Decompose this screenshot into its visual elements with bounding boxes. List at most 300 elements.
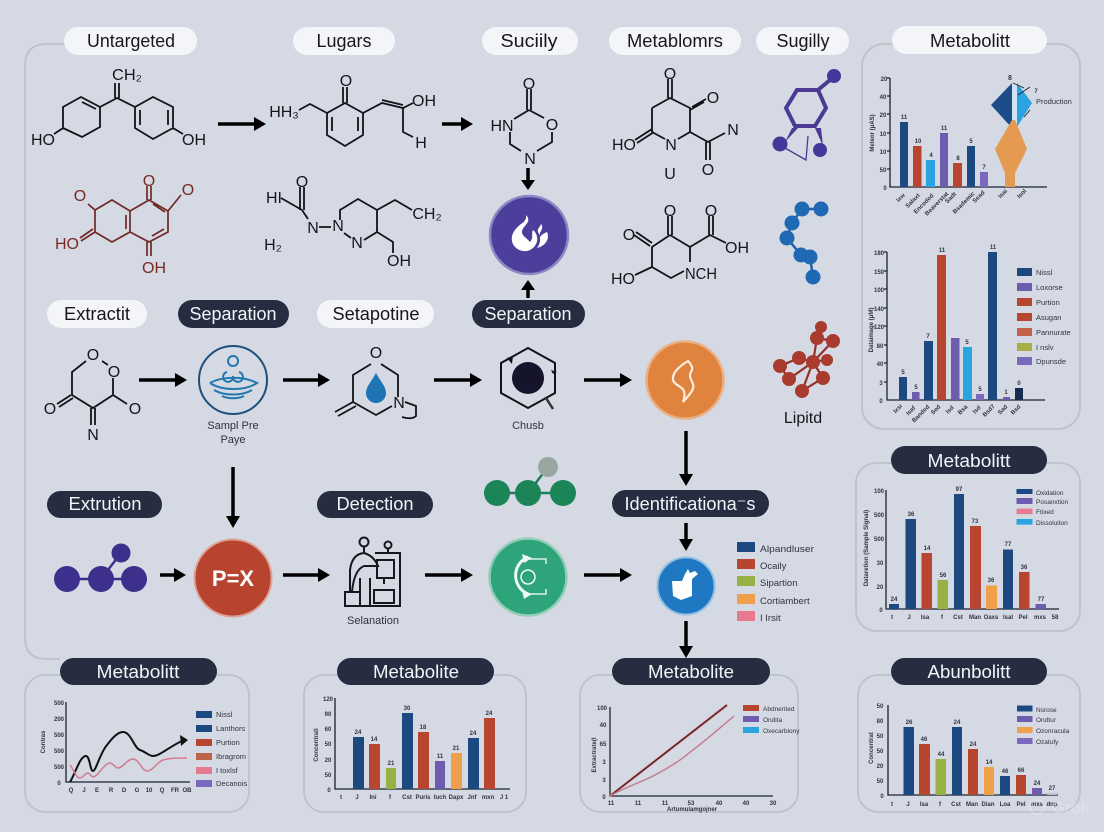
bar chart: J (907, 615, 911, 621)
bar chart: 100 (874, 489, 885, 495)
molecule: top heterocycle: O (523, 76, 535, 93)
legend: workflow: Ocaily (760, 561, 787, 572)
diagram: diamond production figure: 8 (1008, 75, 1012, 82)
line chart: 30 (770, 801, 777, 807)
bar chart: t (340, 795, 342, 801)
molecule: water drop ring (335, 345, 416, 418)
heading: Metabolite: Metabolite (648, 662, 734, 682)
bar chart: middle right: Sad (997, 404, 1010, 416)
legend: middle right: Loxorse (1036, 283, 1063, 292)
molecule: bottom centre left: N (351, 235, 363, 252)
molecule: extraction ring: N (87, 427, 99, 444)
molecule: red quinone: OH (142, 260, 166, 277)
bar chart: top right: Isai (998, 188, 1009, 200)
bar chart: 500 (874, 513, 885, 519)
line chart: 11 (608, 801, 615, 807)
bar chart: Isa (920, 802, 929, 808)
bar chart: t (891, 615, 893, 621)
label: Selanation: Selanation (347, 615, 399, 627)
line chart: Q (160, 788, 165, 794)
bar chart: top right: Ixw (896, 193, 907, 204)
line chart: 500 (54, 701, 65, 707)
bar chart: top right: Bsademic (952, 191, 977, 215)
line chart: 500 (54, 749, 65, 755)
molecule: bottom piperidine: O (664, 203, 676, 220)
molecule: top piperidine: O (707, 90, 719, 107)
arrow (521, 168, 535, 190)
pill: Extractit (47, 300, 147, 328)
bar chart: PeI (1018, 615, 1028, 621)
icon: hexagon with black disc (501, 348, 557, 409)
heading: Metabolitt (60, 658, 217, 685)
bar chart: top right: Salaxt (905, 193, 922, 210)
legend (196, 710, 248, 788)
arrow (226, 467, 240, 528)
molecule: bottom centre left: OH (387, 253, 411, 270)
molecule: top piperidine: N (665, 137, 677, 154)
legend: Purtion (216, 738, 240, 747)
line chart: 11 (662, 801, 669, 807)
bar chart: Concentrat (869, 732, 875, 764)
bar chart: 36 (908, 512, 915, 518)
bar chart: 24 (891, 597, 898, 603)
line chart: Extractrate(I (592, 737, 598, 773)
bar chart: mxs (1031, 802, 1044, 808)
diagram: diamond production figure (991, 75, 1072, 187)
bar chart: middle right: 100 (874, 288, 885, 294)
molecule: bottom centre left: O (296, 174, 308, 191)
molecule: red quinone (55, 173, 194, 277)
arrow (218, 117, 266, 131)
bar chart: J 1 (500, 795, 509, 801)
bar chart: IsaI (1003, 615, 1013, 621)
bar chart: top right: 10 (880, 150, 887, 156)
bar chart: 500 (874, 537, 885, 543)
line chart: 40 (600, 723, 607, 729)
label: Sampl Pre Paye (207, 420, 259, 446)
line chart: Contras (41, 730, 47, 753)
panel: top right charts (862, 26, 1080, 429)
legend: middle right: Purtion (1036, 298, 1060, 307)
bar chart: 0 (327, 788, 331, 794)
bar chart: 60 (325, 727, 332, 733)
bar chart: Concentrati (314, 728, 320, 762)
heading: Metabolite (337, 658, 494, 685)
arrow (160, 568, 186, 582)
bar chart: middle right: 11 (939, 248, 946, 254)
arrow (679, 523, 693, 551)
molecule: green ball and stick (484, 457, 576, 506)
bar chart: Oaxs (984, 615, 999, 621)
bar chart: 14 (371, 737, 378, 743)
molecule: red quinone: HO (55, 236, 79, 253)
bar chart: 50 (325, 742, 332, 748)
bar chart: middle right: 1 (1004, 390, 1008, 396)
bar chart: middle right: Bsa (957, 404, 970, 416)
line chart: 40 (743, 801, 750, 807)
bar chart: 20 (325, 758, 332, 764)
icon: purple flame circle (490, 196, 568, 274)
line chart: G (135, 788, 140, 794)
molecule: top heterocycle: N (524, 151, 536, 168)
bar chart: Puris (415, 795, 431, 801)
molecule: bottom piperidine: O (623, 227, 635, 244)
legend: Abdnerited (763, 706, 795, 713)
bar chart: PeI (1016, 802, 1026, 808)
molecule: water drop ring: N (393, 395, 405, 412)
line chart: 10 (146, 788, 153, 794)
molecule: bottom centre left: N (332, 218, 344, 235)
bar chart: top right: 11 (941, 126, 948, 132)
pill: Extrution: Extrution (68, 494, 142, 514)
legend: middle right: Nissl (1036, 268, 1053, 277)
molecule: bottom centre left: N (307, 220, 319, 237)
bar chart: 97 (956, 487, 963, 493)
bar chart: top right: 20 (880, 113, 887, 119)
molecule: top piperidine: HO (612, 137, 636, 154)
line chart: 11 (635, 801, 642, 807)
pill: Setapotine (317, 300, 434, 328)
bar chart: Cst (402, 795, 412, 801)
bar chart: 20 (877, 585, 884, 591)
pill: Suciily (482, 27, 578, 55)
heading: Metabolitt: Metabolitt (96, 662, 180, 682)
panel: bottom chart 4 (858, 658, 1080, 812)
molecule: top centre left: H (415, 135, 427, 152)
molecule: red quinone: O (182, 182, 194, 199)
bar chart: 36 (1021, 565, 1028, 571)
pill: Identificationa-s (612, 490, 769, 517)
bar chart: middle right: Isd (972, 405, 983, 415)
molecule: top centre left: O (340, 73, 352, 90)
label: Lipitd: Lipitd (784, 410, 822, 427)
pill: Separation (178, 300, 289, 328)
label: Chusb: Chusb (512, 420, 544, 432)
molecule: top piperidine: O (702, 162, 714, 179)
line chart: 3 (602, 778, 606, 784)
bar chart: 18 (420, 725, 427, 731)
legend (1016, 489, 1069, 527)
icon: red P=X circle: P=X (212, 566, 254, 591)
bar chart: Loa (1000, 802, 1011, 808)
label: Sampl Pre Paye: Sampl Pre (207, 420, 259, 432)
bar chart: 56 (940, 573, 947, 579)
bar chart: 24 (470, 731, 477, 737)
legend: Nissl (216, 710, 233, 719)
molecule: water drop ring: O (370, 345, 382, 362)
molecule: top centre left (269, 73, 436, 152)
bar chart: J (355, 795, 359, 801)
molecule: extraction ring: O (129, 401, 141, 418)
bar chart: top right: 5 (969, 139, 973, 145)
bar chart: J (906, 802, 910, 808)
bar chart: Cst (951, 802, 961, 808)
bar chart: f (941, 615, 944, 621)
legend: Ondtur (1036, 717, 1057, 724)
legend: Oxecarbiony (763, 728, 800, 735)
bar chart: 14 (986, 760, 993, 766)
bar chart: top right: Encoded (913, 193, 936, 215)
legend (743, 705, 800, 735)
molecule: bottom piperidine (611, 203, 749, 288)
panel: main workflow frame (25, 44, 66, 659)
line chart: 500 (54, 733, 65, 739)
molecule: bottom centre left: HI (266, 190, 282, 207)
pill: Lugars: Lugars (316, 31, 372, 51)
bar chart: 46 (1002, 769, 1009, 775)
bar chart: 0 (880, 794, 884, 800)
molecule: bottom centre left: CH₂ (412, 206, 442, 223)
bar chart: 50 (877, 704, 884, 710)
bar chart: 50 (877, 779, 884, 785)
diagram: diamond production figure: Production (1036, 97, 1072, 106)
bar chart: 30 (404, 706, 411, 712)
icon: orange circle (646, 342, 724, 418)
icon: blue circle (658, 558, 714, 614)
molecule: extraction ring: O (44, 401, 56, 418)
line chart: D (122, 788, 127, 794)
bar chart: 50 (877, 749, 884, 755)
molecule: red quinone: O (143, 173, 155, 190)
bar chart: middle right: 11 (990, 245, 997, 251)
bar chart: middle right: Bsd7 (982, 404, 997, 419)
legend: middle right: Dpunsde (1036, 357, 1066, 366)
arrow (434, 373, 482, 387)
line chart: 53 (688, 801, 695, 807)
molecule: top left (31, 67, 206, 149)
line chart: 0 (602, 795, 606, 801)
bar chart: middle right: 5 (978, 387, 982, 393)
bar chart: 80 (877, 719, 884, 725)
bar chart: 21 (388, 761, 395, 767)
pill: Sugilly: Sugilly (776, 31, 830, 51)
molecule: bottom piperidine: NCH (685, 266, 717, 283)
molecule: top centre left: HH₃ (269, 104, 299, 121)
bar chart: top right: 50 (880, 168, 887, 174)
pill: Suciily: Suciily (500, 31, 558, 51)
bar chart: f (389, 795, 392, 801)
pill: Extractit: Extractit (64, 304, 130, 324)
bar chart: middle right: 80 (877, 344, 884, 350)
bar chart: top right: Isol (1017, 188, 1028, 200)
legend: I toxlsf (216, 766, 239, 775)
icon: instrument (345, 538, 400, 606)
bar chart: top right: Meteor (μAS) (870, 114, 876, 152)
legend: Ibragrom (216, 752, 246, 761)
bar chart: middle right: Sed (930, 404, 943, 416)
molecule: top centre left: OH (412, 93, 436, 110)
legend: middle right: Pannurate (1036, 328, 1071, 337)
bar chart: Man (969, 615, 981, 621)
legend: Ozonracula (1036, 728, 1070, 735)
bar chart (869, 704, 1058, 808)
diagram: diamond production figure: 7 (1034, 89, 1038, 95)
molecule: red lipid (773, 321, 840, 398)
bar chart: 27 (1049, 786, 1056, 792)
bar chart: middle right: 120 (874, 325, 885, 331)
bar chart: Man (966, 802, 978, 808)
molecule: purple ball and stick (772, 69, 841, 160)
bar chart: top right: 10 (880, 132, 887, 138)
bar chart: 46 (921, 737, 928, 743)
arrow (521, 280, 535, 298)
bar chart: middle right: Ixsi (893, 403, 904, 415)
line chart: Artumulamgojner (667, 807, 718, 813)
pill: Lugars (293, 27, 395, 55)
molecule: top heterocycle (490, 76, 558, 168)
bar chart: middle right: 180 (874, 251, 885, 257)
bar chart: 73 (972, 519, 979, 525)
line chart: 65 (600, 742, 607, 748)
bar chart: t (891, 802, 893, 808)
pill: Metablomrs: Metablomrs (627, 31, 723, 51)
pill: Separation: Separation (190, 304, 276, 324)
label: Sampl Pre Paye: Paye (220, 434, 246, 446)
pill: Sugilly (756, 27, 849, 55)
molecule: bottom piperidine: OH (725, 240, 749, 257)
bar chart: 24 (486, 711, 493, 717)
watermark: Grok: Grok (1052, 800, 1089, 817)
bar chart: top right: 40 (880, 95, 887, 101)
bar chart: top right: 4 (929, 153, 933, 159)
bar chart (314, 697, 510, 801)
bar chart: 120 (323, 697, 334, 703)
molecule: top piperidine (612, 66, 739, 183)
arrow (442, 117, 473, 131)
icon: red P=X circle (194, 540, 272, 616)
legend: Nsrose (1036, 707, 1057, 714)
legend: Ftixed (1036, 509, 1054, 516)
bar chart: 20 (877, 764, 884, 770)
bar chart: 66 (1018, 768, 1025, 774)
bar chart: 50 (877, 734, 884, 740)
bar chart: middle right: 3 (879, 381, 883, 387)
bar chart: Isa (921, 615, 930, 621)
legend: workflow: I Irsit (760, 613, 781, 624)
pill: Untargeted (64, 27, 197, 55)
line chart (592, 705, 777, 813)
line chart: FR (171, 788, 180, 794)
heading: Metabolitt: Metabolitt (930, 31, 1010, 51)
bar chart: top right: 8 (956, 156, 960, 162)
bar chart: top right: 20 (881, 77, 888, 83)
icon: green circle (490, 538, 566, 616)
line chart: Q (69, 788, 74, 794)
bar chart: middle right: Isd (945, 405, 956, 415)
arrow (584, 568, 632, 582)
bar chart: mxn (482, 795, 494, 801)
bar chart: 77 (1005, 542, 1012, 548)
molecule: bottom centre left: H₂ (264, 237, 282, 254)
bar chart: middle right: 5 (901, 370, 905, 376)
bar chart: dnp (1046, 802, 1058, 808)
heading: Metabolite (612, 658, 770, 685)
bar chart: mxs (1034, 615, 1047, 621)
bar chart: 44 (938, 752, 945, 758)
line chart: 500 (54, 765, 65, 771)
molecule: top piperidine: N (727, 122, 739, 139)
bar chart: 36 (988, 578, 995, 584)
bar chart: 24 (355, 730, 362, 736)
bar chart: middle right: Isaf (906, 405, 918, 417)
bar chart: 50 (325, 773, 332, 779)
bar chart: top right: 10 (915, 139, 922, 145)
line chart: J (82, 788, 86, 794)
molecule: extraction ring: O (108, 364, 120, 381)
pill: Detection (317, 491, 433, 518)
bar chart: 24 (970, 742, 977, 748)
line chart: E (95, 788, 99, 794)
molecule: top heterocycle: HN (490, 118, 514, 135)
bar chart: middle right: 5 (914, 385, 918, 391)
legend: Ondita (763, 717, 783, 724)
legend: workflow: Cortiambert (760, 596, 810, 607)
pill: Separation (472, 300, 585, 328)
arrow (139, 373, 187, 387)
bar chart: middle right: Bsd (1010, 404, 1023, 416)
bar chart: middle right: 0 (1017, 381, 1021, 387)
legend: workflow: Sipartion (760, 578, 798, 589)
panel: bottom chart 3 (580, 658, 800, 813)
molecule: bottom centre left (264, 174, 442, 270)
pill: Metablomrs (609, 27, 741, 55)
bar chart: 21 (453, 746, 460, 752)
bar chart: Dapx (449, 795, 464, 801)
bar chart: 26 (906, 720, 913, 726)
bar chart: top right: 0 (883, 186, 887, 192)
bar chart: Jnf (468, 795, 478, 801)
bar chart: Ini (370, 795, 377, 801)
pill: Untargeted: Untargeted (87, 31, 175, 51)
bar chart: middle right: Banded (911, 404, 931, 424)
bar chart: top right: Sead (972, 190, 987, 204)
bar chart: top right: Sadt (945, 192, 958, 205)
line chart: R (109, 788, 114, 794)
bar chart: 0 (879, 608, 883, 614)
legend (1017, 706, 1070, 746)
panel: right middle chart (856, 446, 1080, 631)
bar chart: middle right: 5 (965, 340, 969, 346)
arrow (679, 431, 693, 486)
legend: middle right: I nslv (1036, 343, 1054, 352)
legend: Dissoluiton (1036, 520, 1068, 527)
bar chart: middle right: 40 (877, 362, 884, 368)
arrow (679, 621, 693, 658)
line chart (41, 701, 192, 794)
panel: bottom chart 1 (25, 658, 249, 812)
line chart: 100 (597, 706, 608, 712)
pill: Identificationa-s: Identificationa⁻s (624, 494, 756, 514)
bar chart (864, 487, 1059, 621)
pill: Detection: Detection (336, 494, 414, 514)
molecule: extraction ring: O (87, 347, 99, 364)
bar chart: middle right: 7 (926, 334, 930, 340)
heading: Abunbolitt: Abunbolitt (928, 662, 1010, 682)
bar chart: middle right (869, 245, 1045, 424)
bar chart: middle right: 0 (879, 399, 883, 405)
bar chart: Dataretion (Sample Signal) (864, 510, 870, 586)
heading: Metabolitt: Metabolitt (928, 451, 1010, 471)
icon: sample preparation circle (199, 346, 267, 414)
bar chart: Dian (981, 802, 995, 808)
molecule: top left: CH₂ (112, 67, 142, 84)
pill: Setapotine: Setapotine (332, 304, 420, 324)
molecule: extraction ring (44, 347, 141, 444)
bar chart: 11 (437, 754, 444, 760)
bar chart: Iuch (434, 795, 446, 801)
molecule: bottom piperidine: O (705, 203, 717, 220)
line chart: 40 (716, 801, 723, 807)
